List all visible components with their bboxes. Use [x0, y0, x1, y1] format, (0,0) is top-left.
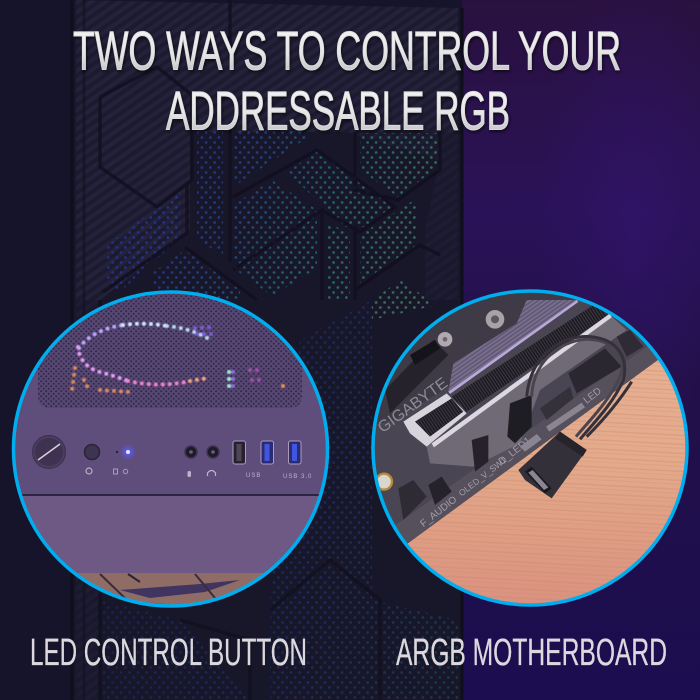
ARGB 3-pin connector: [518, 432, 587, 498]
ARGB cable: [527, 337, 632, 439]
motherboard: [374, 300, 658, 544]
component label text: [418, 386, 604, 530]
mesh vent: [38, 294, 302, 408]
upper-left black slots: [385, 340, 448, 413]
pin header sockets: [398, 330, 643, 520]
icon: reset button: [84, 444, 100, 474]
icon: control knob: [32, 436, 66, 468]
circle border: [373, 291, 687, 605]
front panel surface: [15, 366, 326, 494]
PC case front panel: [72, 0, 462, 700]
circle border: [14, 292, 328, 606]
component label text: F_AUDIO: [418, 494, 459, 530]
mounting holes: [438, 310, 504, 347]
illuminated mesh dots: [107, 130, 437, 320]
lower mesh dots: [100, 300, 458, 700]
component label text: LED: [582, 386, 604, 406]
LED ring: [72, 324, 283, 392]
panel seam: [22, 494, 319, 496]
translucent bracket: [427, 315, 627, 467]
connector labels: [520, 403, 585, 452]
wood surface: [408, 360, 686, 604]
long PCIe slot: [432, 300, 612, 447]
lower panel: [22, 496, 318, 573]
board edge strip: [393, 347, 660, 547]
icon: USB ports: USB 3.0: [283, 474, 312, 480]
icon: status LEDs: [114, 447, 133, 474]
GIGABYTE silkscreen: GIGABYTE: [375, 375, 451, 437]
label: LED control button: LED CONTROL BUTTON: [30, 632, 307, 674]
icon: audio jacks: [185, 446, 219, 477]
hatched board area: [448, 300, 577, 392]
component label text: OLED_V_SW1: [457, 455, 509, 498]
component label text: D_LED1: [497, 435, 534, 467]
circle photo: LED control button: [12, 290, 330, 608]
carbon fibre panel: [76, 0, 458, 300]
icon: USB ports: [233, 441, 312, 480]
hexagon frame lines: [100, 0, 440, 700]
white PCIe latch plate: [403, 393, 467, 447]
circle photo: ARGB motherboard: [371, 289, 689, 607]
title: [73, 20, 621, 142]
title: ADDRESSABLE RGB: [166, 80, 510, 142]
copper mesh strip: [78, 573, 264, 604]
capacitor: [376, 474, 392, 490]
icon: USB ports: USB: [246, 473, 261, 479]
